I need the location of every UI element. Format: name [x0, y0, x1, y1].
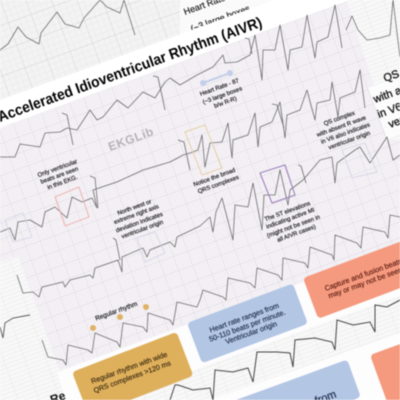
annotation: broad QRS: QRS complexes	[197, 175, 240, 195]
annotation: broad QRS: Notice the broad	[193, 168, 236, 188]
panel: lower left dense grid	[0, 256, 70, 400]
panel: lower orange card	[370, 334, 400, 400]
highlight box: purple ST elevation	[260, 165, 295, 203]
annotation: ST elevations: all AIVR cases)	[277, 224, 317, 244]
EKG trace: lower left fragment	[0, 315, 30, 338]
highlight box: blue left	[5, 213, 32, 242]
panel: upper right zoomed grid	[346, 0, 400, 140]
panel: upper zoomed text backdrop	[180, 0, 300, 44]
panel: gold regular rhythm card	[72, 332, 193, 400]
panel: orange capture and fusion card	[303, 234, 400, 319]
annotation: axis deviation: North west or	[117, 199, 152, 217]
annotation: QS complex	[315, 111, 371, 151]
annotation: only ventricular beats: in this EKG.	[47, 175, 79, 191]
panel: blue heart rate card: Heart rate ranges from	[208, 301, 280, 334]
upper right large QS text	[371, 53, 400, 131]
annotation: regular rhythm with dots	[90, 301, 149, 331]
highlight box: blue V6	[342, 143, 377, 178]
EKG trace: lower strip	[170, 300, 400, 400]
annotation: axis deviation: ventricular origin	[121, 220, 164, 240]
annotation: ST elevations: indicating active MI	[266, 207, 316, 231]
annotation: heart rate	[199, 78, 243, 110]
annotation: regular rhythm with dots: Regular rhythm	[94, 301, 139, 322]
annotation: axis deviation	[113, 199, 164, 240]
panel: blue heart rate card: Ventricular origin	[224, 319, 278, 346]
title band	[0, 0, 400, 128]
panel: upper right text backdrop	[368, 76, 400, 140]
annotation: axis deviation: deviation indicates	[115, 212, 164, 234]
panel: gold regular rhythm card: Regular rhythm with wide	[90, 350, 169, 386]
title: Accelerated Idioventricular Rhythm (AIVR)	[0, 14, 264, 126]
upper right large EKG trace	[346, 0, 400, 57]
annotation: ST elevations	[264, 201, 321, 244]
panel: blue heart rate card: 50-110 beats per minute.	[208, 308, 287, 344]
annotation: ST elevations: (might not be seen in	[266, 215, 321, 239]
annotation: broad QRS	[193, 168, 240, 195]
annotation: QS complex: with absent R wave	[315, 115, 368, 139]
annotation: QS complex: QS complex	[323, 111, 356, 127]
annotation: axis deviation: extreme right axis	[113, 204, 160, 226]
panel: blue heart rate card	[187, 283, 308, 363]
annotation: heart rate: (~3 large boxes	[202, 86, 243, 106]
EKG trace: lead II rhythm strip	[42, 215, 400, 365]
annotation: heart rate: Heart Rate - 87	[199, 78, 241, 98]
annotation: QS complex: ventricular origin	[328, 131, 371, 151]
upper zoomed heart-rate text: (~3 large boxes	[189, 3, 252, 34]
annotation: heart rate: b/w R-R)	[214, 96, 238, 110]
watermark: EKGLib: EKGLib	[106, 124, 156, 154]
highlight box: tan broad QRS	[185, 125, 222, 175]
EKG trace: row three	[17, 137, 400, 297]
panel: lower EKG strip backing	[100, 295, 400, 400]
EKG trace: row two	[0, 70, 365, 240]
highlight box: blue axis	[137, 232, 165, 262]
icon: heart rate dumbbell	[200, 70, 233, 86]
panel: upper zoomed grid left	[0, 0, 300, 110]
panel: gold regular rhythm card: QRS complexes >120 ms	[92, 358, 172, 395]
annotation: QS complex: in V6 also indicates	[320, 122, 371, 146]
upper strip EKG trace	[0, 0, 135, 50]
panel: lower blue card	[225, 360, 361, 400]
annotation: only ventricular beats: Only ventricular	[37, 159, 78, 179]
annotation: only ventricular beats	[37, 159, 79, 191]
highlight box: pink ventricular beat	[55, 187, 89, 226]
annotation: ST elevations: The ST elevations	[264, 201, 311, 223]
panel: lower white area	[57, 247, 400, 400]
annotation: only ventricular beats: beats are seen	[40, 166, 79, 186]
EKG trace: row one	[0, 5, 342, 157]
